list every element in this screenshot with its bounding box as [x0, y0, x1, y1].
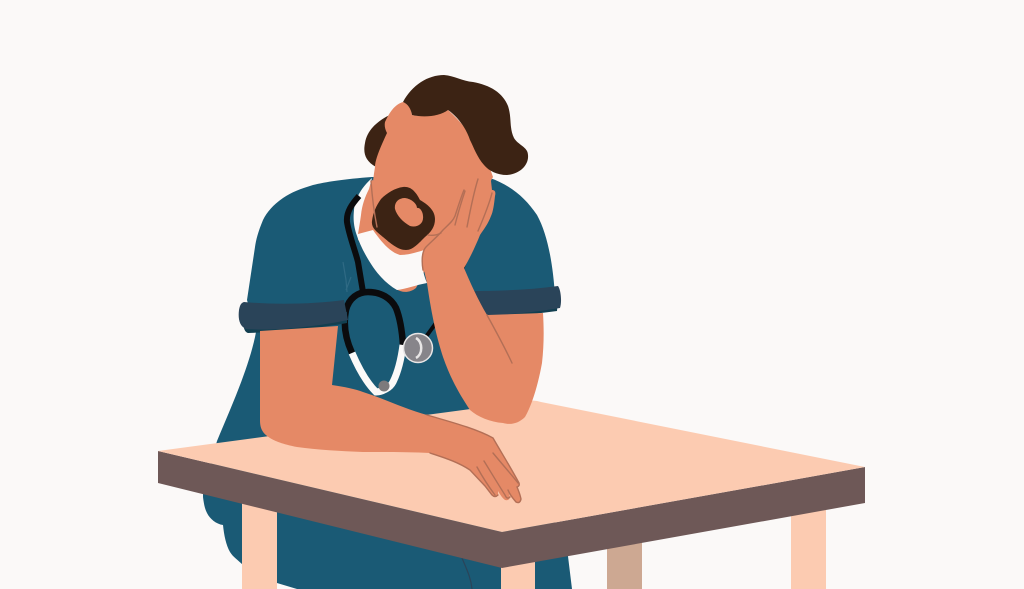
- right arm and hand supporting head: [422, 173, 544, 424]
- stethoscope white loop: [352, 345, 403, 392]
- hair top: [403, 75, 528, 175]
- sleeve crease: [343, 262, 351, 292]
- stethoscope clasp: [378, 380, 390, 392]
- stethoscope dark loop: [345, 292, 403, 353]
- right sleeve band: [470, 286, 561, 315]
- neck skin: [358, 180, 440, 292]
- table front left leg: [242, 500, 277, 589]
- scrubs crease: [462, 558, 472, 589]
- table top and edge: [158, 401, 865, 568]
- hair back: [364, 114, 395, 167]
- chest piece: [404, 334, 432, 362]
- stethoscope neck tube: [347, 196, 363, 292]
- face: [372, 102, 493, 256]
- table side edge: [158, 451, 865, 568]
- stethoscope tube behind wrist: [461, 262, 465, 271]
- table back leg: [607, 530, 642, 589]
- left sleeve band: [239, 300, 348, 330]
- left arm resting on table: [260, 326, 521, 503]
- right sleeve shadow: [480, 300, 558, 317]
- beard: [372, 187, 435, 250]
- surgical mask: [354, 178, 427, 290]
- table front leg: [501, 555, 535, 589]
- stethoscope: [345, 196, 436, 392]
- arm and finger contour lines: [371, 179, 521, 503]
- doctor torso and scrubs: [203, 177, 572, 589]
- table right leg: [791, 500, 826, 589]
- chest piece tube: [425, 323, 436, 338]
- left sleeve shadow: [243, 312, 347, 333]
- table top surface: [158, 401, 865, 532]
